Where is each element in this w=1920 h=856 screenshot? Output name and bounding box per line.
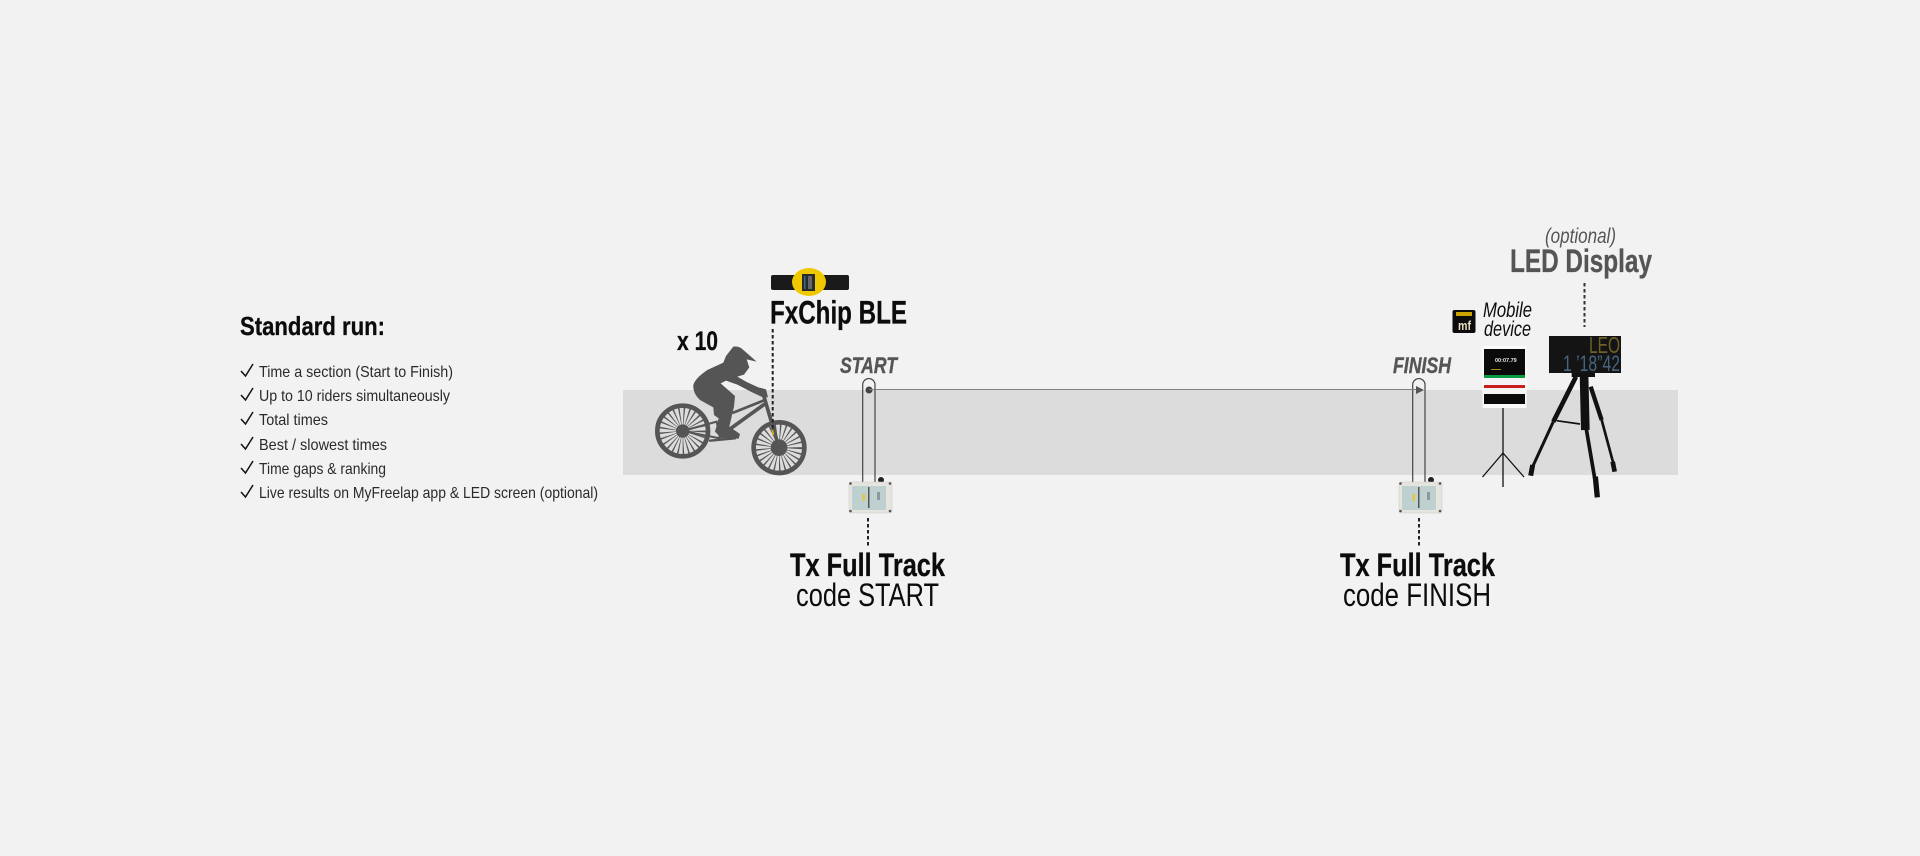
label: FxChip BLE: FxChip BLE — [770, 294, 907, 330]
label: optional: (optional) — [1545, 225, 1616, 248]
icon: LED display: LEO — [1589, 332, 1620, 358]
rear wheel — [657, 406, 708, 456]
check marks — [241, 364, 253, 497]
dotted leader: LED display — [1584, 283, 1586, 327]
feature list items: Time a section (Start to Finish) — [259, 364, 453, 381]
dotted leader: chip to fork — [772, 329, 774, 430]
icon: tablet with results: 00:07.79 — [1495, 358, 1517, 364]
arrow: start to finish — [866, 386, 1424, 394]
icon: FxChip strap — [771, 268, 849, 296]
icon: tablet stand — [1482, 408, 1524, 487]
feature list items — [259, 364, 598, 502]
label: x 10: x 10 — [677, 326, 718, 356]
label: code START: code START — [796, 577, 939, 613]
label: Mobile device: Mobile — [1483, 299, 1532, 322]
finish timing loop — [1413, 379, 1425, 483]
feature list items: Live results on MyFreelap app & LED screen (optional) — [259, 485, 598, 502]
icon: MyFreelap app — [1452, 310, 1476, 333]
panel: standard run feature list — [240, 311, 598, 502]
rider silhouette — [693, 347, 768, 439]
front wheel — [754, 422, 804, 473]
label: START: START — [840, 353, 898, 378]
label: LED Display: LED Display — [1510, 243, 1652, 279]
icon: LED display — [1549, 332, 1621, 376]
label: Tx Full Track start: Tx Full Track — [790, 547, 945, 583]
feature list items: Time gaps & ranking — [259, 461, 386, 478]
feature list items: Up to 10 riders simultaneously — [259, 388, 450, 405]
icon: MyFreelap app: mf — [1458, 318, 1472, 333]
dotted leader: finish box — [1418, 518, 1420, 546]
icon: Tx Full Track finish box — [1399, 477, 1442, 513]
feature list items: Total times — [259, 412, 328, 429]
label: Mobile device — [1483, 299, 1532, 341]
feature list items: Best / slowest times — [259, 437, 387, 454]
icon: tablet with results — [1482, 346, 1526, 408]
icon: LED display: 1 ’18”42 — [1563, 351, 1620, 376]
label: Tx Full Track finish: Tx Full Track — [1340, 547, 1495, 583]
icon: Tx Full Track start box — [849, 477, 892, 513]
dotted leader: start box — [867, 518, 869, 546]
chip on fork — [771, 430, 774, 435]
start timing loop — [863, 379, 875, 483]
label: code FINISH: code FINISH — [1343, 577, 1491, 613]
heading: standard run: Standard run: — [240, 311, 385, 341]
label: FINISH: FINISH — [1393, 353, 1452, 378]
label: Mobile device: device — [1484, 318, 1531, 341]
track band — [623, 390, 1678, 475]
icon: tripod — [1531, 373, 1615, 497]
bike frame — [683, 397, 779, 448]
icon: mountain bike rider — [657, 347, 804, 473]
